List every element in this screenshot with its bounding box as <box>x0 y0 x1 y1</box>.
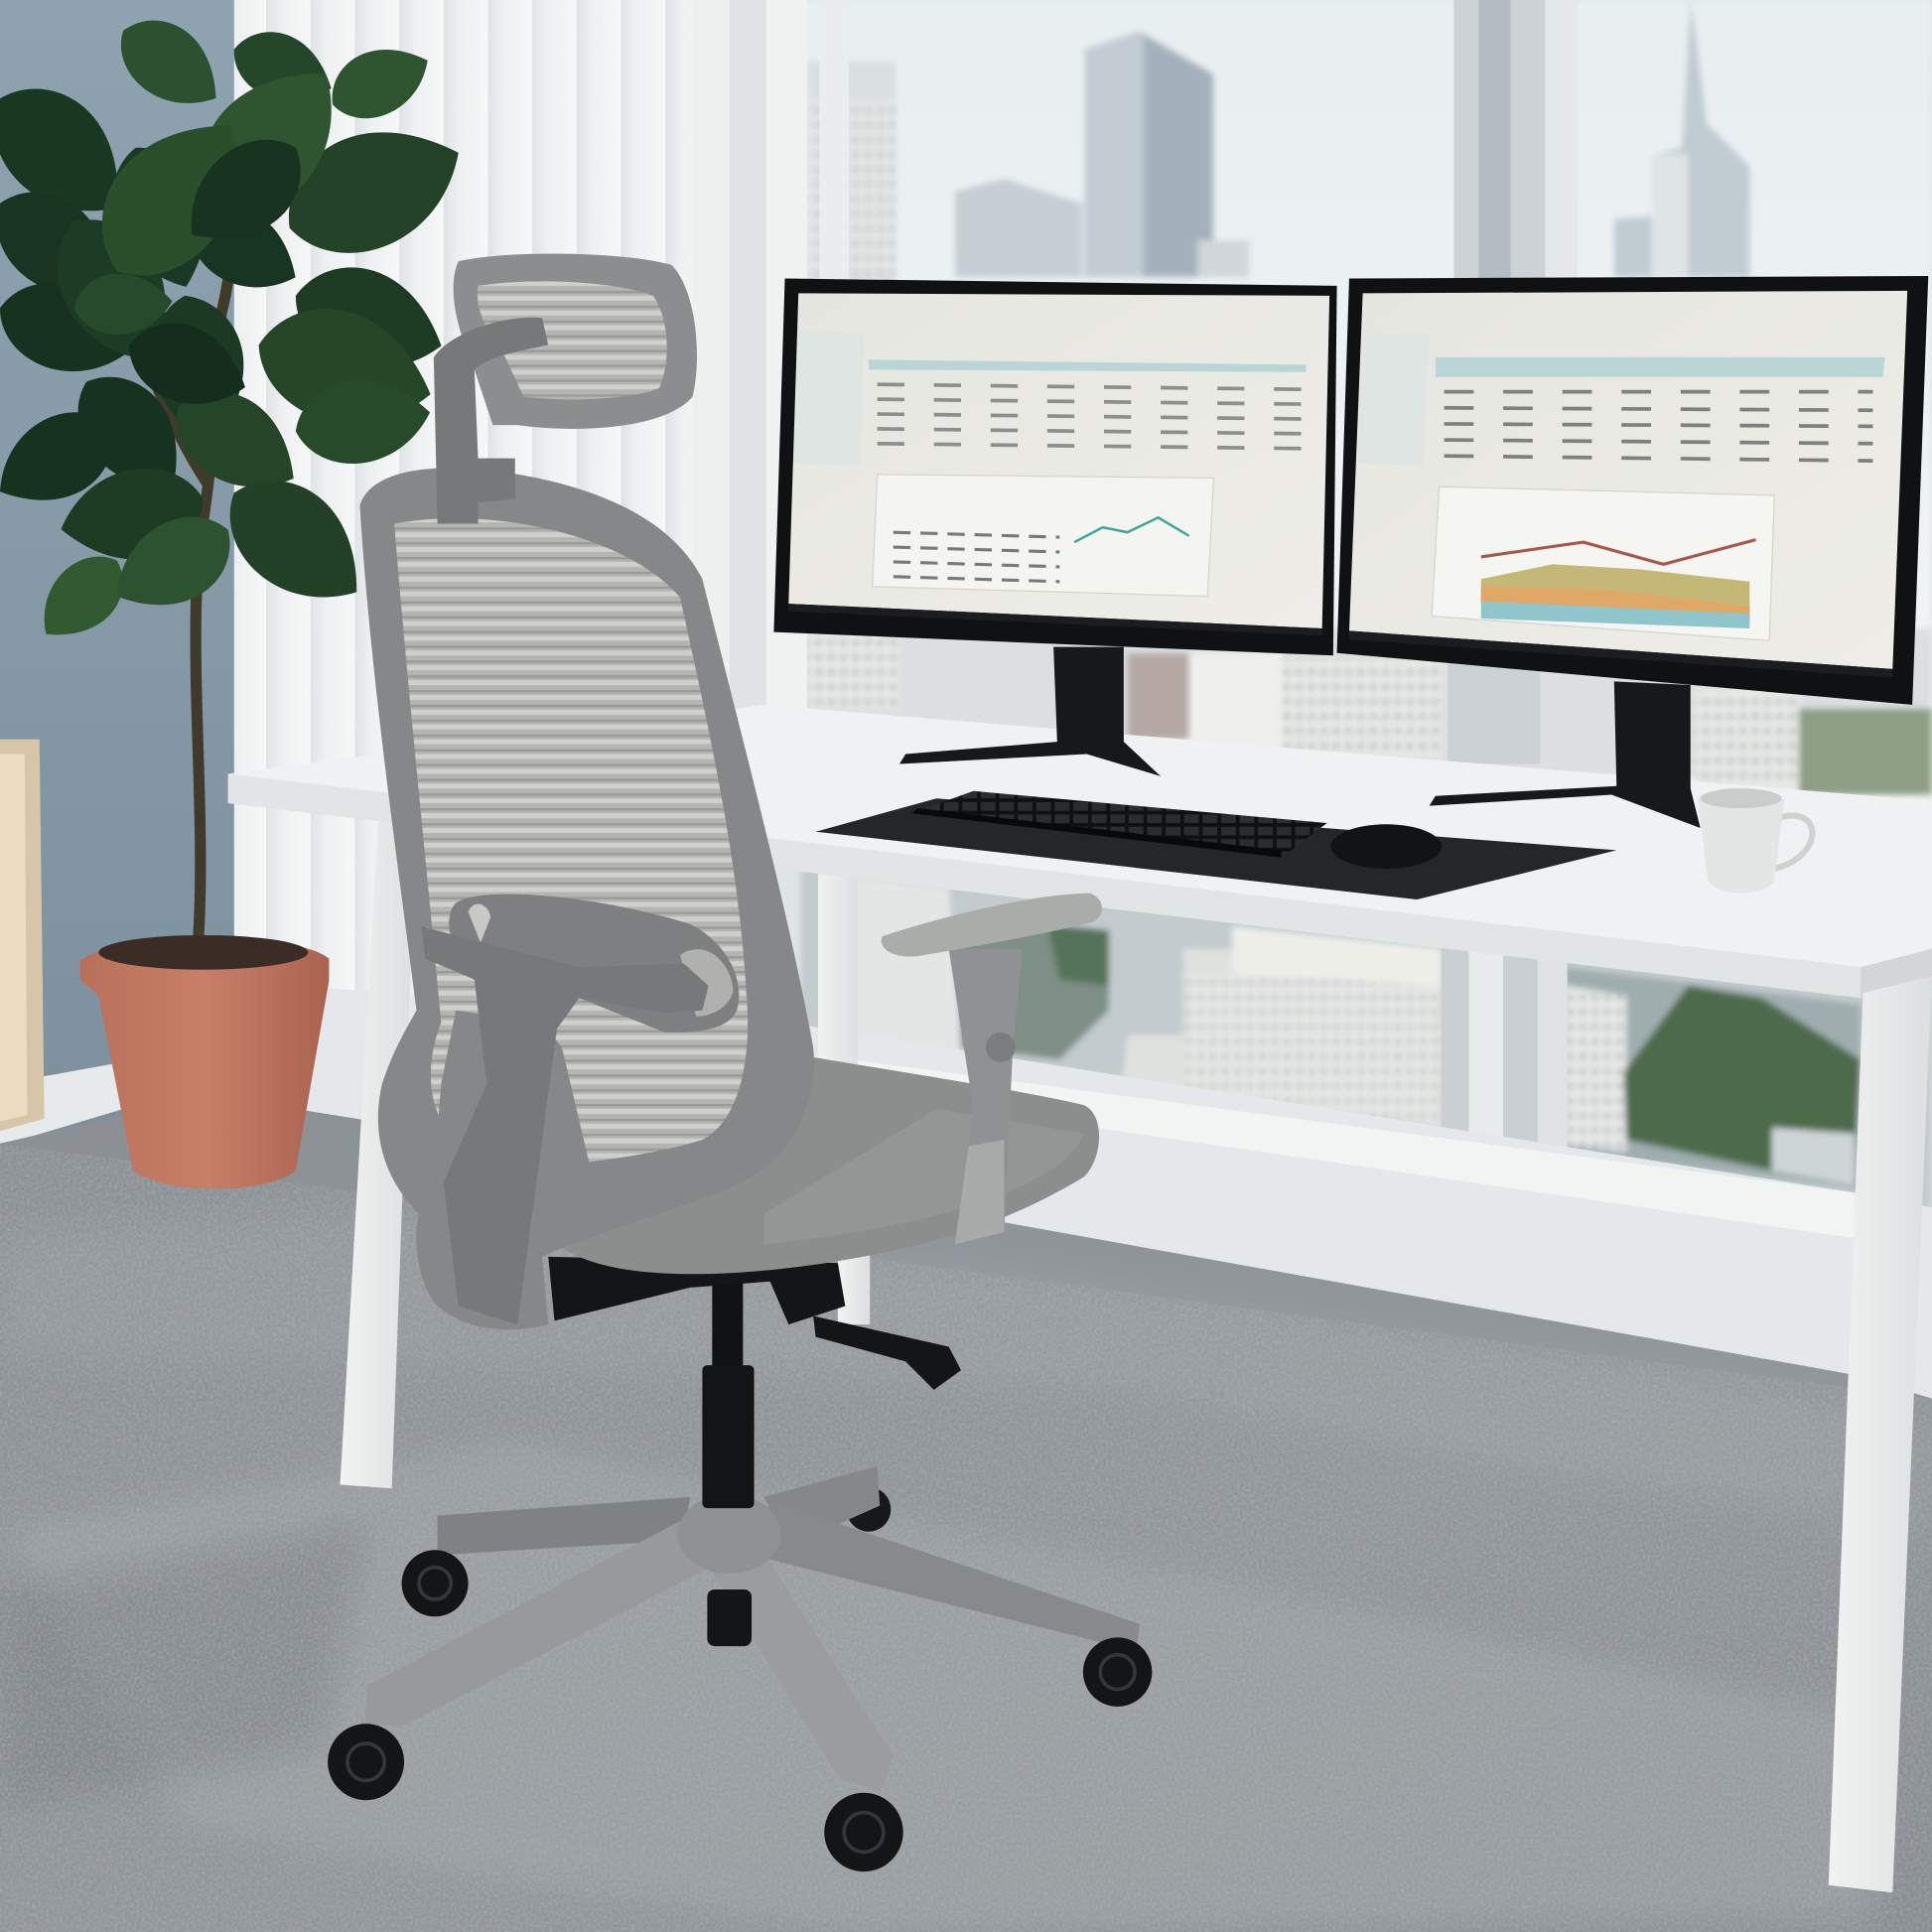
left armrest bracket <box>421 926 709 1324</box>
chart panel <box>873 475 1213 597</box>
line chart <box>1074 517 1189 542</box>
monitor screen <box>1349 291 1907 669</box>
area chart <box>1481 540 1756 628</box>
spreadsheet rows <box>1445 392 1872 461</box>
plant leaves <box>0 1 481 657</box>
office chair <box>328 253 1152 1871</box>
monitor stand <box>1430 681 1701 828</box>
headrest <box>434 253 697 523</box>
window view: city between monitors and desk <box>770 628 1932 794</box>
mouse <box>1330 824 1442 869</box>
seat highlight <box>763 1109 1084 1244</box>
terracotta pot <box>80 937 329 1189</box>
backrest frame <box>359 468 814 1329</box>
window view: city below desk <box>801 863 1932 1220</box>
window view: sky and upper skyline <box>690 0 1932 863</box>
baseboard <box>0 1062 123 1146</box>
gas lift column <box>702 1282 755 1508</box>
taskbar <box>788 604 1322 635</box>
seat cushion <box>541 1057 1099 1274</box>
lumbar support <box>449 895 739 1033</box>
monitor bezel <box>1337 276 1928 705</box>
monitor bezel <box>773 278 1337 655</box>
carpet floor <box>0 1109 1932 1932</box>
sidebar <box>793 331 865 466</box>
chair base <box>364 1466 1140 1793</box>
desk mat <box>816 798 1616 899</box>
backrest mesh <box>394 518 748 1162</box>
monitor stand <box>899 647 1161 776</box>
plant stem <box>129 160 240 955</box>
pot soil <box>98 935 308 970</box>
spreadsheet header band <box>869 359 1307 372</box>
spreadsheet rows <box>878 384 1302 449</box>
vertical blinds <box>234 0 692 1115</box>
casters <box>328 1550 1152 1871</box>
coffee mug <box>1698 787 1812 893</box>
wall <box>0 0 246 1146</box>
data table <box>894 532 1059 582</box>
lower column stub <box>707 1589 752 1646</box>
base arms <box>438 1497 690 1555</box>
taskbar <box>1349 630 1892 678</box>
sill highlight <box>850 1059 1855 1238</box>
spreadsheet header band <box>1436 357 1885 377</box>
keyboard <box>911 791 1327 858</box>
tilt mechanism and lever <box>548 1257 961 1390</box>
rear caster <box>847 1487 891 1532</box>
desk right leg <box>1829 976 1932 1892</box>
desk back legs <box>818 863 870 1324</box>
window frame: mullions <box>690 0 1578 1161</box>
right monitor <box>1337 276 1928 828</box>
right armrest <box>882 894 1102 1244</box>
window sill <box>296 986 1932 1399</box>
left monitor <box>773 278 1337 776</box>
base hub <box>678 1494 781 1574</box>
headrest support post <box>434 318 548 523</box>
sidebar <box>1358 333 1430 466</box>
monitor screen <box>788 293 1329 628</box>
potted plant <box>0 1 481 1189</box>
wooden frame at left edge <box>0 740 45 1131</box>
desk top <box>228 705 1932 998</box>
chart panel <box>1432 486 1774 640</box>
desk left leg <box>341 801 416 1488</box>
